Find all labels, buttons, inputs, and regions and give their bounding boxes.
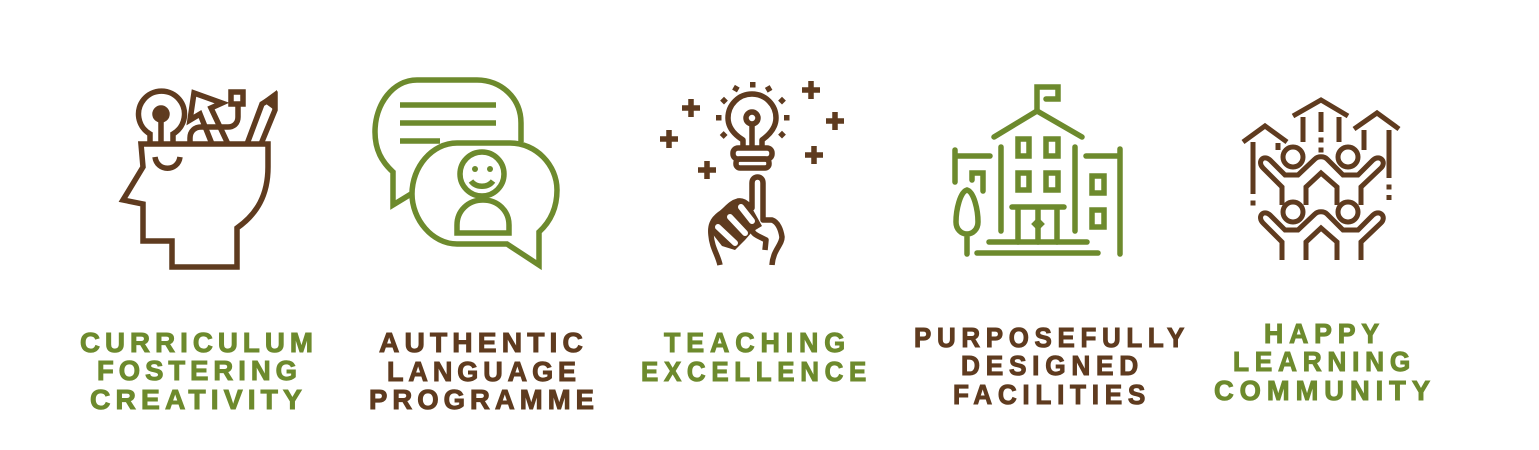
label: authentic language programme [369,327,599,415]
label: teaching excellence: TEACHING [664,327,851,358]
label: authentic language programme: AUTHENTIC [379,327,588,358]
label: authentic language programme: LANGUAGE [387,356,581,387]
label: purposefully designed facilities [914,322,1190,410]
label: curriculum fostering creativity [80,327,318,415]
label: happy learning community: HAPPY [1264,318,1385,349]
label: authentic language programme: PROGRAMME [369,384,599,415]
icon: head with creative tools [123,90,277,267]
icon: school building with tree [955,87,1120,254]
label: curriculum fostering creativity: CURRICULUM [80,327,318,358]
icon: speech bubbles with smiling person [375,80,557,265]
label: happy learning community [1214,318,1436,406]
label: purposefully designed facilities: DESIGNED [961,350,1144,381]
label: purposefully designed facilities: FACILITIES [953,379,1151,410]
label: happy learning community: LEARNING [1233,346,1416,377]
label: teaching excellence: EXCELLENCE [641,356,872,387]
label: curriculum fostering creativity: CREATIVITY [90,384,307,415]
label: curriculum fostering creativity: FOSTERING [97,355,302,386]
label: purposefully designed facilities: PURPOSEFULLY [914,322,1190,353]
icon: light bulb above pointing hand [660,81,844,265]
label: happy learning community: COMMUNITY [1214,375,1436,406]
label: teaching excellence [641,327,872,387]
icon: community of people and houses [1243,100,1399,260]
